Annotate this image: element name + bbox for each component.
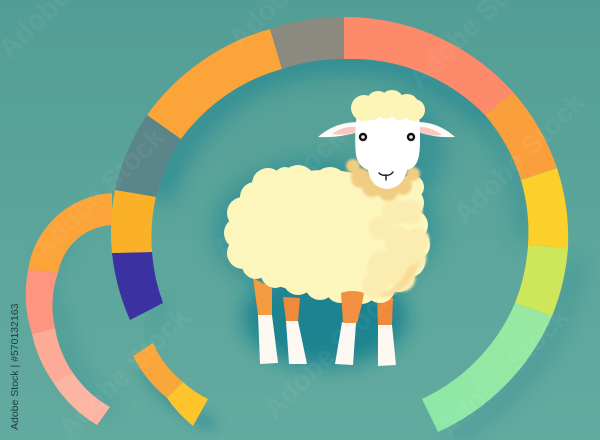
ring segment: salmon xyxy=(344,17,513,115)
arc segment: orange xyxy=(28,193,112,273)
stock watermarks: Adobe Stock xyxy=(27,121,171,264)
arc segment: coral xyxy=(26,270,58,334)
ring segment: yellow left xyxy=(111,190,156,253)
ring segment: lime xyxy=(515,245,568,316)
leg 2 xyxy=(283,297,300,321)
ring segment: mint green xyxy=(422,303,552,432)
ring segment: taupe xyxy=(270,17,344,69)
leg 1 xyxy=(253,278,272,315)
wool collar xyxy=(346,159,420,201)
left ear xyxy=(318,122,358,137)
ring segment: orange top xyxy=(147,29,282,139)
stock watermarks: Adobe Stock xyxy=(447,86,591,229)
arc segment: light coral xyxy=(32,328,73,382)
ring segment: orange right xyxy=(485,92,557,180)
arc segment: orange xyxy=(133,343,183,398)
stock watermarks: Adobe Stock xyxy=(257,281,401,424)
sheep body wool xyxy=(224,165,430,304)
sheep head xyxy=(355,112,420,189)
left small arc xyxy=(26,193,112,425)
leg 4 xyxy=(377,298,393,325)
stock watermarks: Adobe Stock xyxy=(52,301,196,440)
eye right xyxy=(407,133,415,141)
nose and mouth xyxy=(379,172,393,180)
sheep xyxy=(224,90,455,366)
shadows behind arcs and sheep xyxy=(46,62,575,436)
arc segment: pale coral xyxy=(53,373,110,425)
lower short arc xyxy=(133,343,208,426)
stock watermarks: Adobe Stock xyxy=(432,301,576,440)
ring segment: slate xyxy=(115,115,181,197)
main colour ring xyxy=(111,17,568,432)
leg 3 white part xyxy=(335,322,356,365)
ring segment: yellow right xyxy=(521,168,568,248)
stock id caption: Adobe Stock | #570132163 xyxy=(9,303,21,430)
right ear xyxy=(418,122,455,137)
sheep legs xyxy=(253,278,396,366)
eye left xyxy=(359,133,367,141)
arc segment: yellow xyxy=(167,382,208,426)
stock watermarks: Adobe Stock xyxy=(207,121,351,264)
ring segment: blue xyxy=(112,252,163,320)
sheep chest shading xyxy=(362,199,429,298)
head wool tuft xyxy=(351,90,425,121)
leg 3 upper part over wool xyxy=(341,291,364,323)
chest lower shade xyxy=(380,262,419,297)
